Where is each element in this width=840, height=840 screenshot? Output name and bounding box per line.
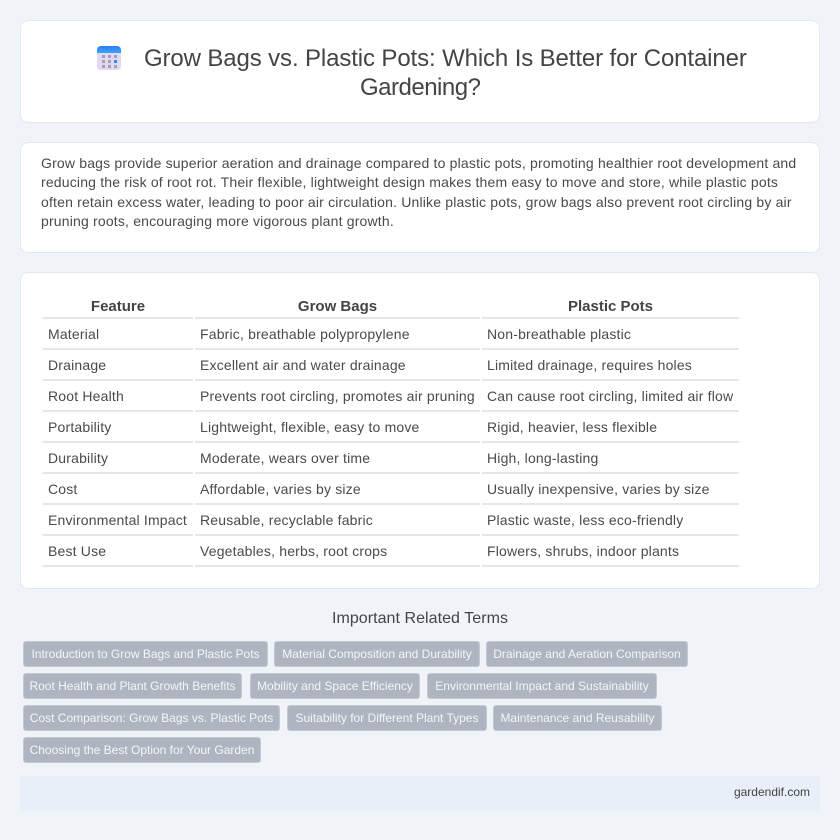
tag <box>23 705 280 731</box>
row: Cost <box>48 481 710 497</box>
row: Material <box>48 326 631 342</box>
intro paragraph: often retain excess water, leading to poor air circulation. Unlike plastic pots, grow bags also prevent root circling by air <box>41 194 792 210</box>
title <box>144 45 747 101</box>
title: Gardening? <box>360 74 480 101</box>
row: Environmental Impact: Environmental Impact <box>48 512 187 528</box>
row: Best Use: Flowers, shrubs, indoor plants <box>487 543 679 559</box>
row: Durability <box>48 450 598 466</box>
row: Durability: High, long-lasting <box>487 450 598 466</box>
row: Cost: Affordable, varies by size <box>200 481 361 497</box>
comparison table <box>43 298 739 567</box>
row: Portability: Portability <box>48 419 111 435</box>
row: Environmental Impact: Plastic waste, less eco-friendly <box>487 512 683 528</box>
row: Portability <box>48 419 657 435</box>
table header row: Feature <box>91 298 145 315</box>
tag: Cost Comparison: Grow Bags vs. Plastic Pots <box>30 711 273 725</box>
row: Portability: Lightweight, flexible, easy to move <box>200 419 420 435</box>
row: Material: Fabric, breathable polypropylene <box>200 326 410 342</box>
title: Grow Bags vs. Plastic Pots: Which Is Better for Container <box>144 45 747 72</box>
header panel <box>20 20 820 123</box>
tag <box>274 641 480 667</box>
row: Root Health: Prevents root circling, promotes air pruning <box>200 388 475 404</box>
tag <box>287 705 487 731</box>
row: Material: Material <box>48 326 99 342</box>
source credit: gardendif.com <box>734 785 810 799</box>
intro paragraph <box>41 155 796 229</box>
tag: Root Health and Plant Growth Benefits <box>29 679 236 693</box>
row: Material: Non-breathable plastic <box>487 326 631 342</box>
row: Environmental Impact <box>48 512 684 528</box>
row: Cost: Usually inexpensive, varies by size <box>487 481 710 497</box>
row: Durability: Durability <box>48 450 108 466</box>
intro paragraph: Grow bags provide superior aeration and drainage compared to plastic pots, promoting healthier root development and <box>41 155 796 171</box>
tag: Maintenance and Reusability <box>500 711 655 725</box>
row: Cost: Cost <box>48 481 78 497</box>
tag: Choosing the Best Option for Your Garden <box>30 743 254 757</box>
table header row <box>91 298 653 315</box>
intro text panel <box>20 142 820 253</box>
tag <box>23 641 268 667</box>
icon: calendar grid <box>97 46 121 70</box>
row: Root Health: Root Health <box>48 388 124 404</box>
related terms tags <box>23 641 688 763</box>
tag <box>486 641 688 667</box>
row: Environmental Impact: Reusable, recyclable fabric <box>200 512 373 528</box>
intro paragraph: reducing the risk of root rot. Their flexible, lightweight design makes them easy to move and store, while plastic pots <box>41 174 778 190</box>
row: Root Health: Can cause root circling, limited air flow <box>487 388 733 404</box>
comparison table panel <box>20 272 820 589</box>
tag <box>23 673 242 699</box>
row: Root Health <box>48 388 734 404</box>
row: Best Use: Vegetables, herbs, root crops <box>200 543 387 559</box>
tag: Material Composition and Durability <box>282 647 472 661</box>
tag <box>250 673 420 699</box>
row: Drainage <box>48 357 692 373</box>
row: Best Use: Best Use <box>48 543 106 559</box>
related terms heading: Important Related Terms <box>332 610 508 627</box>
row: Best Use <box>48 543 679 559</box>
tag <box>23 737 261 763</box>
row: Drainage: Excellent air and water drainage <box>200 357 406 373</box>
tag: Environmental Impact and Sustainability <box>435 679 649 693</box>
tag: Suitability for Different Plant Types <box>296 711 478 725</box>
tag <box>427 673 657 699</box>
table header row: Grow Bags <box>298 298 377 315</box>
row: Portability: Rigid, heavier, less flexible <box>487 419 657 435</box>
tag: Mobility and Space Efficiency <box>257 679 413 693</box>
tag: Introduction to Grow Bags and Plastic Pots <box>31 647 260 661</box>
row: Drainage: Drainage <box>48 357 106 373</box>
tag <box>493 705 662 731</box>
footer bar <box>20 776 820 810</box>
table header row: Plastic Pots <box>568 298 653 315</box>
tag: Drainage and Aeration Comparison <box>493 647 681 661</box>
intro paragraph: pruning roots, encouraging more vigorous plant growth. <box>41 213 394 229</box>
row: Drainage: Limited drainage, requires holes <box>487 357 692 373</box>
row: Durability: Moderate, wears over time <box>200 450 370 466</box>
